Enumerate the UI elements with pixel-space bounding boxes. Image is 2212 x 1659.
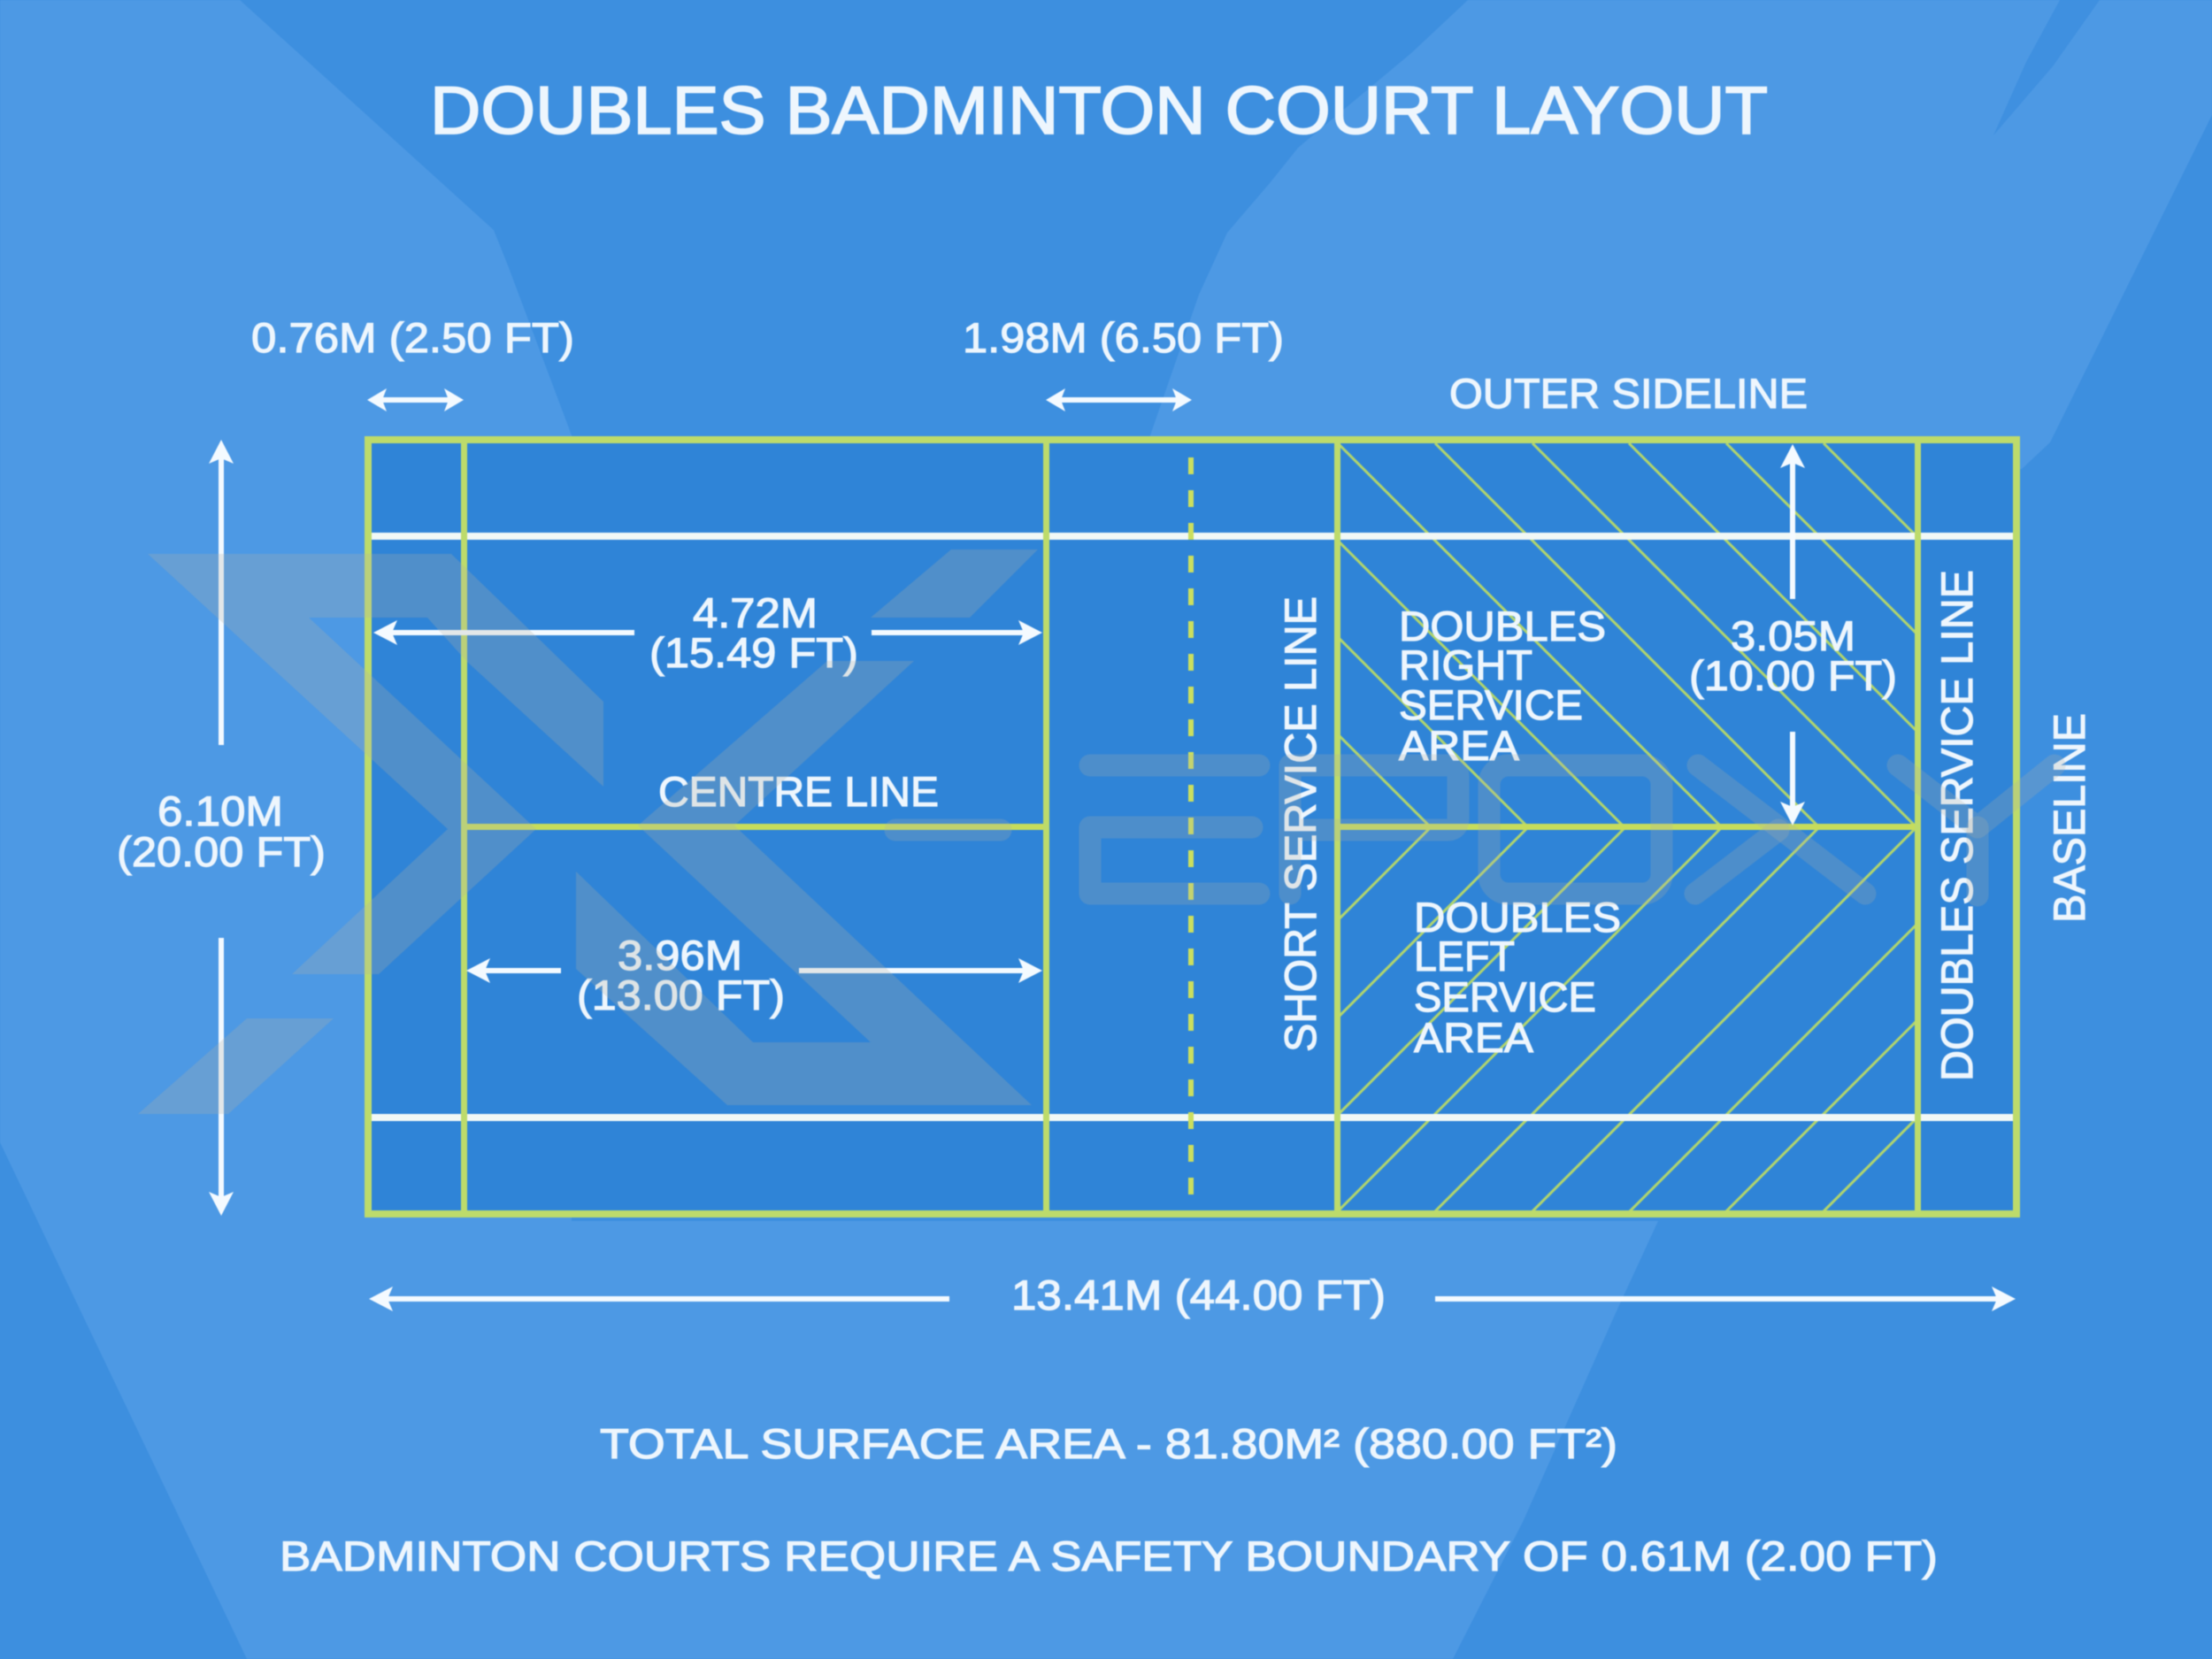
label: doubles right service area: RIGHT — [1399, 641, 1532, 688]
dimension: 4.72m: (15.49 FT) — [649, 629, 858, 676]
net dashed line — [1188, 440, 1194, 1214]
dimension: 4.72m: 4.72M — [693, 589, 818, 636]
dimension: 6.10m: 6.10M — [157, 787, 283, 834]
outer court boundary — [368, 440, 2016, 1214]
label: doubles service line: DOUBLES SERVICE LINE — [1932, 570, 1982, 1081]
dimension: 1.98m — [963, 314, 1284, 411]
label: doubles left service area — [1414, 894, 1621, 1061]
dimension: 6.10m: (20.00 FT) — [117, 828, 326, 875]
label: short service line: SHORT SERVICE LINE — [1276, 596, 1325, 1052]
dimension: 3.96m — [466, 932, 1042, 1018]
label: doubles left service area: SERVICE — [1414, 973, 1596, 1020]
label: outer sideline: OUTER SIDELINE — [1449, 370, 1808, 417]
dimension: 3.96m: (13.00 FT) — [577, 972, 785, 1018]
hatching: doubles left service area — [1340, 829, 1916, 1211]
dimension: 0.76m — [251, 314, 574, 411]
dimension: 4.72m — [373, 589, 1042, 676]
label: doubles left service area: LEFT — [1414, 933, 1515, 979]
watermark logo — [138, 549, 1038, 1114]
label: baseline: BASELINE — [2045, 713, 2094, 923]
label: doubles right service area: AREA — [1399, 722, 1520, 769]
label: doubles left service area: AREA — [1414, 1014, 1534, 1061]
dimension: 6.10m — [117, 440, 326, 1216]
label: doubles left service area: DOUBLES — [1414, 894, 1621, 941]
dimension: 3.05m — [1689, 444, 1897, 826]
centre line — [465, 824, 1918, 830]
total surface area note: TOTAL SURFACE AREA - 81.80M² (880.00 FT²) — [600, 1420, 1617, 1467]
label: doubles right service area: SERVICE — [1399, 681, 1583, 728]
label: centre line: CENTRE LINE — [658, 768, 939, 815]
vertical court lines — [461, 440, 1921, 1214]
dimension: 0.76m: 0.76M (2.50 FT) — [251, 314, 574, 361]
dimension: 1.98m: 1.98M (6.50 FT) — [963, 314, 1284, 361]
hatching: doubles right service area — [1340, 442, 1916, 825]
label: doubles right service area — [1399, 603, 1606, 769]
dimension: 13.41m — [369, 1271, 2016, 1318]
dimension: 3.05m: 3.05M — [1731, 612, 1855, 659]
court surface — [368, 440, 2016, 1214]
dimension: 3.96m: 3.96M — [618, 932, 742, 979]
watermark wordmark — [895, 765, 2055, 895]
white service lines — [372, 533, 2013, 1121]
label: doubles right service area: DOUBLES — [1399, 603, 1606, 649]
dimension: 3.05m: (10.00 FT) — [1689, 652, 1897, 699]
title: DOUBLES BADMINTON COURT LAYOUT — [430, 73, 1768, 149]
safety boundary note: BADMINTON COURTS REQUIRE A SAFETY BOUNDARY OF 0.61M (2.00 FT) — [280, 1532, 1938, 1579]
dimension: 13.41m: 13.41M (44.00 FT) — [1011, 1271, 1386, 1318]
badminton court diagram — [364, 435, 2021, 1218]
